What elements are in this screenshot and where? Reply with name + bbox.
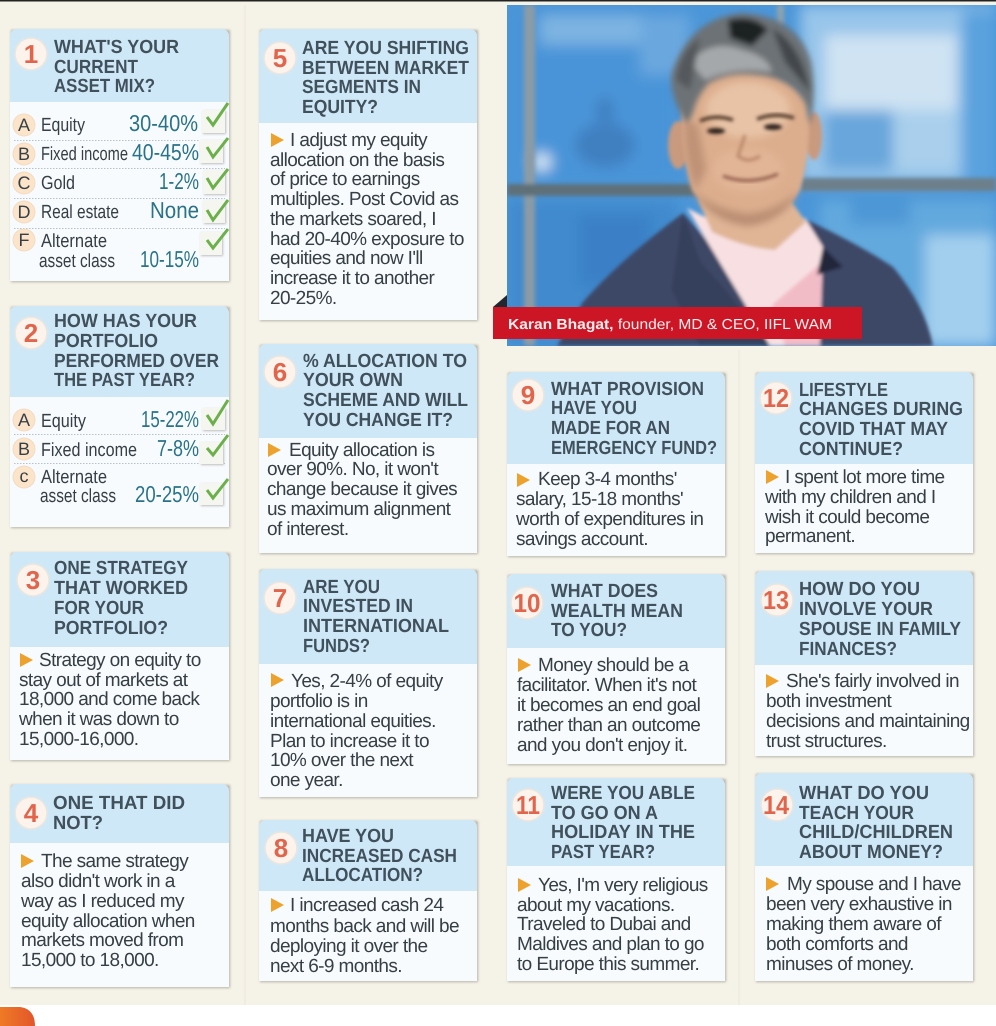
heading 7: INVESTED IN xyxy=(303,596,413,617)
answer 5 xyxy=(270,130,464,309)
panel: question 1 xyxy=(10,29,230,282)
asset mix rows: Gold xyxy=(41,173,75,194)
answer 10: rather than an outcome xyxy=(517,715,700,736)
number 11 badge: 11 xyxy=(516,790,540,820)
answer 7: Plan to increase it to xyxy=(270,731,429,752)
asset mix rows: 30-40% xyxy=(129,110,198,136)
answer 10: and you don't enjoy it. xyxy=(517,735,687,756)
answer 4: The same strategy xyxy=(41,851,189,872)
heading 7: FUNDS? xyxy=(303,636,370,657)
heading 6: YOUR OWN xyxy=(303,370,403,391)
performance rows: 7-8% xyxy=(157,435,199,461)
heading 1: CURRENT xyxy=(54,57,138,78)
heading 13: FINANCES? xyxy=(799,639,897,660)
number 7 badge xyxy=(264,582,296,614)
answer 9: worth of expenditures in xyxy=(515,509,703,530)
asset mix rows: Equity xyxy=(41,115,85,136)
heading 2: HOW HAS YOUR xyxy=(54,311,197,332)
photo: Karan Bhagat xyxy=(507,5,996,346)
answer 5: the markets soared, I xyxy=(270,209,436,230)
heading 12: COVID THAT MAY xyxy=(799,419,948,440)
answer 9: salary, 15-18 months' xyxy=(516,489,683,510)
answer 12: I spent lot more time xyxy=(785,467,945,488)
number 2 badge: 2 xyxy=(24,318,38,348)
orange footer tab xyxy=(0,1007,35,1026)
answer 11: Maldives and plan to go xyxy=(517,934,704,955)
heading 5: BETWEEN MARKET xyxy=(302,58,469,79)
answer 6: Equity allocation is xyxy=(289,440,434,461)
answer 6: change because it gives xyxy=(267,479,457,500)
heading 3: ONE STRATEGY xyxy=(54,558,188,579)
heading 1 xyxy=(54,37,179,97)
answer 9: Keep 3-4 months' xyxy=(538,469,677,490)
panel: question 3 xyxy=(10,552,230,761)
answer 13: She's fairly involved in xyxy=(786,671,959,692)
answer 3: Strategy on equity to xyxy=(39,650,201,671)
answer 13: both investment xyxy=(766,691,892,712)
answer 5: multiples. Post Covid as xyxy=(270,189,458,210)
check marks xyxy=(200,400,228,505)
answer 7 xyxy=(270,671,444,791)
heading 10: WEALTH MEAN xyxy=(551,601,683,622)
performance rows: A xyxy=(18,410,30,430)
asset mix rows: asset class xyxy=(39,251,115,272)
answer 13: trust structures. xyxy=(766,731,887,752)
asset mix rows: Fixed income xyxy=(41,144,128,165)
asset mix rows: A xyxy=(18,115,30,135)
heading 5: SEGMENTS IN xyxy=(302,77,421,98)
heading 7 xyxy=(303,577,449,657)
number 8 badge xyxy=(265,832,297,864)
heading 13 xyxy=(799,579,961,660)
panel: question 7 xyxy=(259,569,478,798)
heading 8: ALLOCATION? xyxy=(302,865,423,886)
answer 5: I adjust my equity xyxy=(290,130,428,151)
heading 1: ASSET MIX? xyxy=(54,76,155,97)
answer 14 xyxy=(766,874,961,975)
panel: question 4 xyxy=(10,784,230,988)
answer 11: about my vacations. xyxy=(517,895,675,916)
number 5 badge xyxy=(264,42,296,74)
answer 3: stay out of markets at xyxy=(19,670,189,691)
heading 5: ARE YOU SHIFTING xyxy=(302,38,469,59)
answer 5: of price to earnings xyxy=(270,169,420,190)
number 1 badge: 1 xyxy=(24,39,38,69)
panel: question 6 xyxy=(259,344,478,554)
answer 14: been very exhaustive in xyxy=(766,894,952,915)
heading 3: FOR YOUR xyxy=(54,598,144,619)
caption ribbon: Karan Bhagat, founder, MD & CEO, IIFL WAM xyxy=(508,317,832,333)
answer 4: equity allocation when xyxy=(21,911,195,932)
person xyxy=(557,65,933,346)
answer 3: 15,000-16,000. xyxy=(19,729,138,750)
answer 14: both comforts and xyxy=(766,934,908,955)
answer 10: Money should be a xyxy=(538,655,689,676)
heading 3: PORTFOLIO? xyxy=(54,618,168,639)
heading 5: EQUITY? xyxy=(302,97,378,118)
heading 6 xyxy=(303,351,468,431)
answer 10: facilitator. When it's not xyxy=(517,675,697,696)
answer 8: months back and will be xyxy=(270,916,459,937)
heading 13: SPOUSE IN FAMILY xyxy=(799,619,961,640)
panel: question 2 xyxy=(10,306,230,528)
answer 14: minuses of money. xyxy=(766,954,914,975)
heading 11: TO GO ON A xyxy=(551,803,658,824)
heading 2: PERFORMED OVER xyxy=(54,351,219,372)
answer 13: decisions and maintaining xyxy=(766,711,970,732)
performance rows: Equity xyxy=(41,411,86,432)
heading 14: WHAT DO YOU xyxy=(799,783,929,804)
heading 13: HOW DO YOU xyxy=(799,579,920,600)
answer 12: wish it could become xyxy=(764,507,929,528)
asset mix rows: 1-2% xyxy=(159,168,199,194)
asset mix rows: B xyxy=(18,144,30,164)
heading 4 xyxy=(53,793,185,834)
number 12 badge: 12 xyxy=(763,383,789,413)
answer 8: next 6-9 months. xyxy=(270,956,402,977)
face shading xyxy=(684,82,800,226)
heading 9: MADE FOR AN xyxy=(551,418,670,439)
answer 7: portfolio is in xyxy=(270,691,368,712)
number 3 badge: 3 xyxy=(26,565,40,595)
answer 9: savings account. xyxy=(516,529,648,550)
heading 12: CHANGES DURING xyxy=(799,399,963,420)
answer 6: us maximum alignment xyxy=(267,499,452,520)
heading 10: WHAT DOES xyxy=(551,581,658,602)
asset mix rows: 40-45% xyxy=(132,139,199,165)
heading 3: THAT WORKED xyxy=(54,578,188,599)
answer 14: making them aware of xyxy=(766,914,942,935)
heading 10: TO YOU? xyxy=(551,620,627,641)
heading 2 xyxy=(54,311,219,391)
answer 5: had 20-40% exposure to xyxy=(270,229,464,250)
heading 10 xyxy=(551,581,683,641)
heading 13: INVOLVE YOUR xyxy=(799,599,933,620)
number 14 badge: 14 xyxy=(763,790,789,820)
number 3 badge xyxy=(17,564,49,596)
heading 5 xyxy=(302,38,469,118)
answer 3 xyxy=(18,650,201,750)
heading 4: ONE THAT DID xyxy=(53,793,185,814)
heading 3 xyxy=(54,558,188,639)
heading 7: INTERNATIONAL xyxy=(303,616,449,637)
heading 8 xyxy=(302,826,457,886)
heading 2: PORTFOLIO xyxy=(54,331,158,352)
answer 5: allocation on the basis xyxy=(270,150,444,171)
heading 11: PAST YEAR? xyxy=(551,842,655,863)
window frame bars xyxy=(507,5,996,346)
heading 7: ARE YOU xyxy=(303,577,380,598)
heading 12: CONTINUE? xyxy=(799,439,903,460)
heading 8: HAVE YOU xyxy=(302,826,394,847)
performance rows: c xyxy=(20,466,28,486)
panel: question 13 xyxy=(755,571,974,757)
panel: question 14 xyxy=(755,773,974,982)
performance rows: Alternate xyxy=(41,467,107,488)
answer 7: 10% over the next xyxy=(270,750,414,771)
answer 13 xyxy=(766,671,970,752)
asset mix rows: F xyxy=(18,230,30,250)
check marks xyxy=(200,103,228,255)
heading 9: WHAT PROVISION xyxy=(551,379,704,400)
asset mix rows: Alternate xyxy=(41,231,107,252)
answer 6 xyxy=(267,440,457,540)
heading 2: THE PAST YEAR? xyxy=(54,370,195,391)
answer 4 xyxy=(20,851,195,971)
answer 14: My spouse and I have xyxy=(787,874,961,895)
performance rows: 15-22% xyxy=(141,406,199,432)
heading 11 xyxy=(551,783,695,863)
answer 4: markets moved from xyxy=(21,930,183,951)
performance rows: 20-25% xyxy=(135,481,199,507)
answer 11: to Europe this summer. xyxy=(517,954,699,975)
heading 1: WHAT'S YOUR xyxy=(54,37,179,58)
heading 14 xyxy=(799,783,953,863)
answer 12: permanent. xyxy=(765,526,855,547)
panel: question 5 xyxy=(259,29,478,321)
answer 3: when it was down to xyxy=(18,709,179,730)
performance rows xyxy=(13,406,225,507)
number 1 badge xyxy=(15,38,47,70)
number 8 badge: 8 xyxy=(274,833,288,863)
answer 4: way as I reduced my xyxy=(20,891,185,912)
performance rows: Fixed income xyxy=(41,440,137,461)
answer 12: with my children and I xyxy=(764,487,936,508)
number 4 badge xyxy=(15,797,47,829)
caption ribbon xyxy=(493,295,862,339)
asset mix rows: Real estate xyxy=(41,202,119,223)
panel: question 10 xyxy=(507,574,726,765)
answer 5: 20-25%. xyxy=(270,288,337,309)
answer 8: I increased cash 24 xyxy=(290,895,444,916)
number 7 badge: 7 xyxy=(273,583,287,613)
answer 3: 18,000 and come back xyxy=(19,689,200,710)
performance rows: asset class xyxy=(40,486,116,507)
heading 11: WERE YOU ABLE xyxy=(551,783,695,804)
number 6 badge xyxy=(264,356,296,388)
heading 14: CHILD/CHILDREN xyxy=(799,822,953,843)
heading 6: YOU CHANGE IT? xyxy=(303,410,453,431)
answer 8 xyxy=(270,895,459,977)
answer 5: increase it to another xyxy=(270,268,436,289)
heading 9: EMERGENCY FUND? xyxy=(551,438,717,459)
panel: question 12 xyxy=(755,372,974,554)
answer 6: over 90%. No, it won't xyxy=(267,459,439,480)
performance rows: B xyxy=(18,439,30,459)
number 13 badge: 13 xyxy=(763,585,789,615)
answer 9 xyxy=(515,469,703,550)
heading 14: ABOUT MONEY? xyxy=(799,842,943,863)
asset mix rows xyxy=(13,110,225,272)
answer 12 xyxy=(764,467,945,547)
answer 6: of interest. xyxy=(267,519,349,540)
number 4 badge: 4 xyxy=(24,798,39,828)
answer 5: equities and now I'll xyxy=(270,248,423,269)
number 5 badge: 5 xyxy=(273,43,287,73)
answer 7: Yes, 2-4% of equity xyxy=(291,671,444,692)
answer 7: international equities. xyxy=(270,711,436,732)
panel: question 8 xyxy=(259,820,478,982)
heading 8: INCREASED CASH xyxy=(302,846,457,867)
heading 9 xyxy=(551,379,717,459)
answer 11: Traveled to Dubai and xyxy=(517,914,691,935)
answer 10: it becomes an end goal xyxy=(517,695,700,716)
asset mix rows: None xyxy=(150,197,199,223)
asset mix rows: 10-15% xyxy=(140,246,199,272)
number 9 badge xyxy=(512,379,544,411)
answer 11: Yes, I'm very religious xyxy=(538,875,708,896)
number 10 badge: 10 xyxy=(514,588,540,618)
heading 12 xyxy=(799,380,963,460)
asset mix rows: C xyxy=(18,173,30,193)
answer 4: also didn't work in a xyxy=(21,871,176,892)
heading 6: % ALLOCATION TO xyxy=(303,351,467,372)
answer 8: deploying it over the xyxy=(270,936,427,957)
number 6 badge: 6 xyxy=(273,357,287,387)
heading 11: HOLIDAY IN THE xyxy=(551,822,695,843)
answer 4: 15,000 to 18,000. xyxy=(21,950,159,971)
heading 12: LIFESTYLE xyxy=(799,380,888,401)
heading 14: TEACH YOUR xyxy=(799,803,914,824)
panel: question 9 xyxy=(507,372,726,557)
heading 6: SCHEME AND WILL xyxy=(303,390,468,411)
answer 7: one year. xyxy=(270,770,343,791)
heading 9: HAVE YOU xyxy=(551,398,637,419)
number 2 badge xyxy=(15,317,47,349)
answer 11 xyxy=(517,875,708,975)
asset mix rows: D xyxy=(18,202,30,222)
number 9 badge: 9 xyxy=(521,380,535,410)
answer 10 xyxy=(517,655,700,756)
panel: question 11 xyxy=(507,778,726,982)
heading 4: NOT? xyxy=(53,813,103,834)
